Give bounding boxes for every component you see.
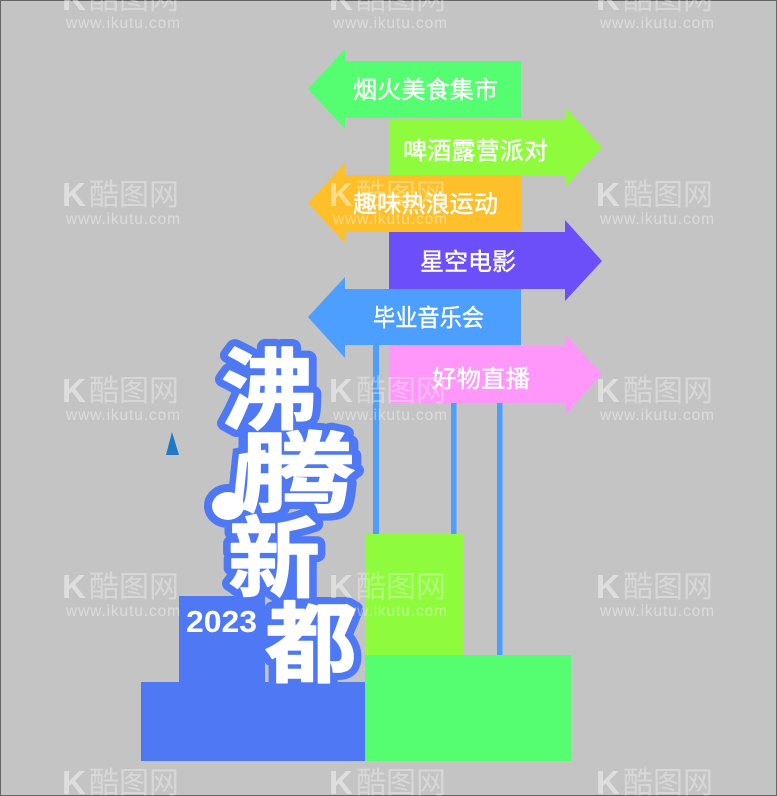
title: 沸腾新都 — [211, 342, 357, 694]
arrow: beer camping party — [389, 107, 602, 187]
watermarks: 酷图网 — [89, 571, 179, 604]
year label: 2023 — [186, 604, 257, 639]
watermarks: 酷图网 — [356, 571, 446, 604]
title outline: 沸 — [221, 342, 317, 441]
watermarks: 酷图网 — [89, 179, 179, 212]
arrow: starry movie: 星空电影 — [420, 249, 516, 276]
block: green base — [365, 655, 571, 761]
watermarks: www.ikutu.com — [65, 211, 180, 228]
watermarks: www.ikutu.com — [65, 15, 180, 32]
watermarks: K — [596, 372, 620, 409]
arrow: beer camping party: 啤酒露营派对 — [403, 138, 548, 165]
watermarks: www.ikutu.com — [599, 407, 714, 424]
arrow: fun sports: 趣味热浪运动 — [353, 191, 498, 218]
watermarks: K — [596, 568, 620, 605]
watermarks: www.ikutu.com — [599, 211, 714, 228]
watermarks: 酷图网 — [623, 179, 713, 212]
title outline: 腾 — [241, 425, 355, 524]
arrow: graduation concert: 毕业音乐会 — [373, 305, 484, 332]
watermarks: www.ikutu.com — [65, 407, 180, 424]
block: wide blue base — [141, 682, 365, 761]
watermarks: www.ikutu.com — [599, 15, 714, 32]
title fill: 沸 — [221, 342, 317, 441]
title fill: 新 — [228, 510, 320, 609]
watermarks: K — [329, 372, 353, 409]
arrow: graduation concert — [308, 277, 521, 358]
watermarks: K — [596, 176, 620, 213]
block: small blue base — [179, 596, 265, 682]
watermarks: 酷图网 — [356, 375, 446, 408]
signpost poles — [373, 345, 502, 656]
watermarks: www.ikutu.com — [599, 603, 714, 620]
watermarks: K — [62, 176, 86, 213]
title fill — [212, 342, 357, 694]
arrow: live shopping: 好物直播 — [432, 366, 530, 393]
block: lime base — [365, 534, 464, 655]
title fill: 腾 — [241, 425, 355, 524]
watermarks: K — [62, 372, 86, 409]
arrow: live shopping — [389, 334, 602, 415]
arrow: food market: 烟火美食集市 — [353, 77, 498, 104]
arrow: starry movie — [389, 220, 602, 301]
watermarks: www.ikutu.com — [332, 407, 447, 424]
watermarks: 酷图网 — [89, 375, 179, 408]
watermarks: 酷图网 — [356, 179, 446, 212]
arrow: food market — [308, 49, 521, 129]
watermarks: 酷图网 — [623, 571, 713, 604]
title outline: 新 — [228, 510, 320, 609]
icon: small blue triangle — [166, 432, 179, 455]
watermarks: K — [329, 568, 353, 605]
arrow: fun sports — [308, 163, 521, 243]
title outline — [211, 342, 357, 694]
watermarks: 酷图网 — [623, 375, 713, 408]
watermarks: www.ikutu.com — [332, 15, 447, 32]
watermarks: K — [62, 568, 86, 605]
watermarks: K — [329, 176, 353, 213]
watermarks: www.ikutu.com — [332, 603, 447, 620]
title outline: 都 — [265, 595, 357, 694]
watermarks: www.ikutu.com — [65, 603, 180, 620]
watermarks: www.ikutu.com — [332, 211, 447, 228]
title fill: 都 — [265, 595, 357, 694]
